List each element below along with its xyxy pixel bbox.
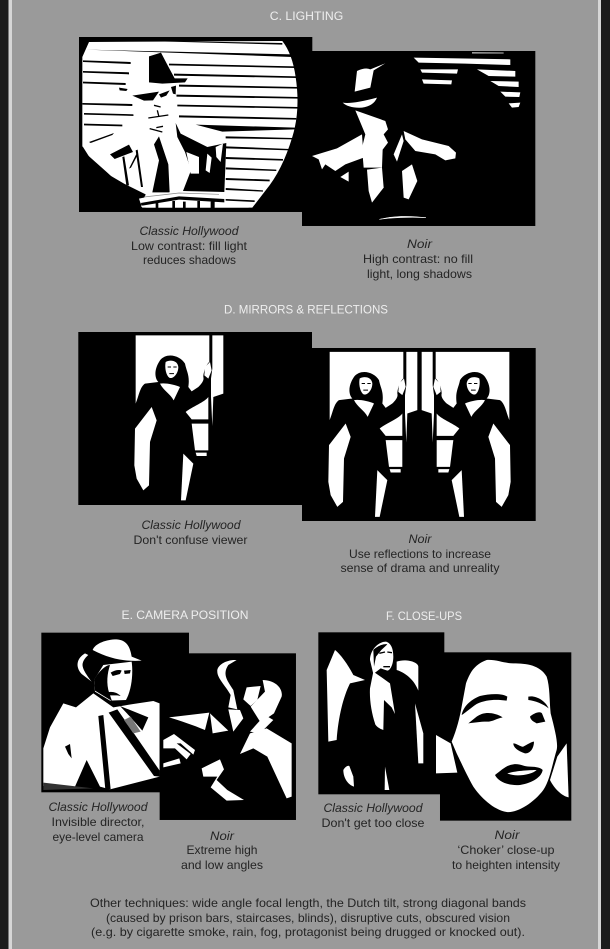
caption: noir close-ups: ‘Choker’ close-up bbox=[458, 843, 555, 857]
caption: classic Hollywood close-ups bbox=[322, 801, 425, 830]
caption: noir camera: Extreme high bbox=[186, 843, 258, 857]
image: noir, woman and mirror reflection bbox=[302, 348, 536, 521]
text block: other techniques bbox=[90, 896, 526, 939]
image: classic Hollywood, woman at window bbox=[78, 332, 312, 505]
caption: noir camera: and low angles bbox=[181, 858, 263, 872]
section C: lighting bbox=[79, 9, 535, 281]
caption: noir lighting: Noir bbox=[407, 237, 433, 251]
text block: other techniques: Other techniques: wide angle focal length, the Dutch tilt, strong diagonal bands bbox=[90, 896, 526, 910]
image: classic Hollywood, eye-level man in suit bbox=[41, 633, 189, 792]
heading: E. Camera Position: E. CAMERA POSITION bbox=[122, 608, 248, 622]
image: classic Hollywood lighting, man behind blinds bbox=[79, 37, 312, 212]
text block: other techniques: (caused by prison bars, staircases, blinds), disruptive cuts, obscured vision bbox=[106, 911, 510, 925]
caption: classic Hollywood lighting bbox=[131, 224, 248, 267]
caption: noir mirrors: Use reflections to increase bbox=[349, 547, 491, 561]
rope belt bbox=[139, 191, 249, 208]
section E: camera position bbox=[41, 608, 296, 872]
caption: classic Hollywood camera: Classic Hollywood bbox=[48, 800, 148, 814]
caption: noir lighting: light, long shadows bbox=[367, 267, 472, 281]
caption: noir lighting: High contrast: no fill bbox=[363, 252, 473, 266]
caption: classic Hollywood lighting: Classic Hollywood bbox=[140, 224, 239, 238]
image: noir lighting, man in shadow bbox=[302, 51, 535, 226]
image: classic Hollywood, full-length woman in scarf bbox=[318, 632, 444, 794]
caption: classic Hollywood lighting: Low contrast: fill light bbox=[131, 239, 248, 253]
section F: close-ups bbox=[318, 609, 571, 872]
caption: classic Hollywood mirrors: Don't confuse viewer bbox=[134, 533, 248, 547]
heading: D. Mirrors & Reflections: D. MIRRORS & REFLECTIONS bbox=[224, 302, 388, 316]
caption: noir camera bbox=[181, 829, 263, 872]
caption: classic Hollywood close-ups: Classic Hollywood bbox=[324, 801, 423, 815]
image: noir, choker close-up of woman's face bbox=[436, 652, 571, 821]
hat and face shadows bbox=[149, 53, 188, 84]
caption: classic Hollywood camera: Invisible director, bbox=[52, 815, 144, 829]
caption: noir mirrors: Noir bbox=[408, 532, 433, 546]
caption: noir close-ups: to heighten intensity bbox=[452, 858, 560, 872]
text block: other techniques: (e.g. by cigarette smoke, rain, fog, protagonist being drugged or knocked out). bbox=[91, 925, 525, 939]
caption: noir mirrors bbox=[340, 532, 500, 575]
caption: noir lighting bbox=[363, 237, 473, 281]
heading: F. Close-ups: F. CLOSE-UPS bbox=[386, 609, 462, 623]
caption: classic Hollywood camera: eye-level camera bbox=[52, 830, 144, 844]
caption: classic Hollywood mirrors bbox=[134, 518, 248, 547]
caption: noir camera: Noir bbox=[210, 829, 235, 843]
caption: classic Hollywood camera bbox=[48, 800, 148, 844]
image: noir, extreme low-angle man bbox=[160, 653, 296, 820]
caption: classic Hollywood mirrors: Classic Hollywood bbox=[142, 518, 241, 532]
caption: classic Hollywood close-ups: Don't get too close bbox=[322, 816, 425, 830]
heading: C. Lighting: C. LIGHTING bbox=[270, 9, 343, 23]
caption: classic Hollywood lighting: reduces shadows bbox=[143, 253, 236, 267]
figure: white coat and face bbox=[82, 80, 226, 205]
caption: noir close-ups bbox=[452, 828, 560, 872]
section D: mirrors and reflections bbox=[78, 302, 536, 575]
caption: noir mirrors: sense of drama and unreality bbox=[340, 561, 500, 575]
caption: noir close-ups: Noir bbox=[494, 828, 521, 842]
